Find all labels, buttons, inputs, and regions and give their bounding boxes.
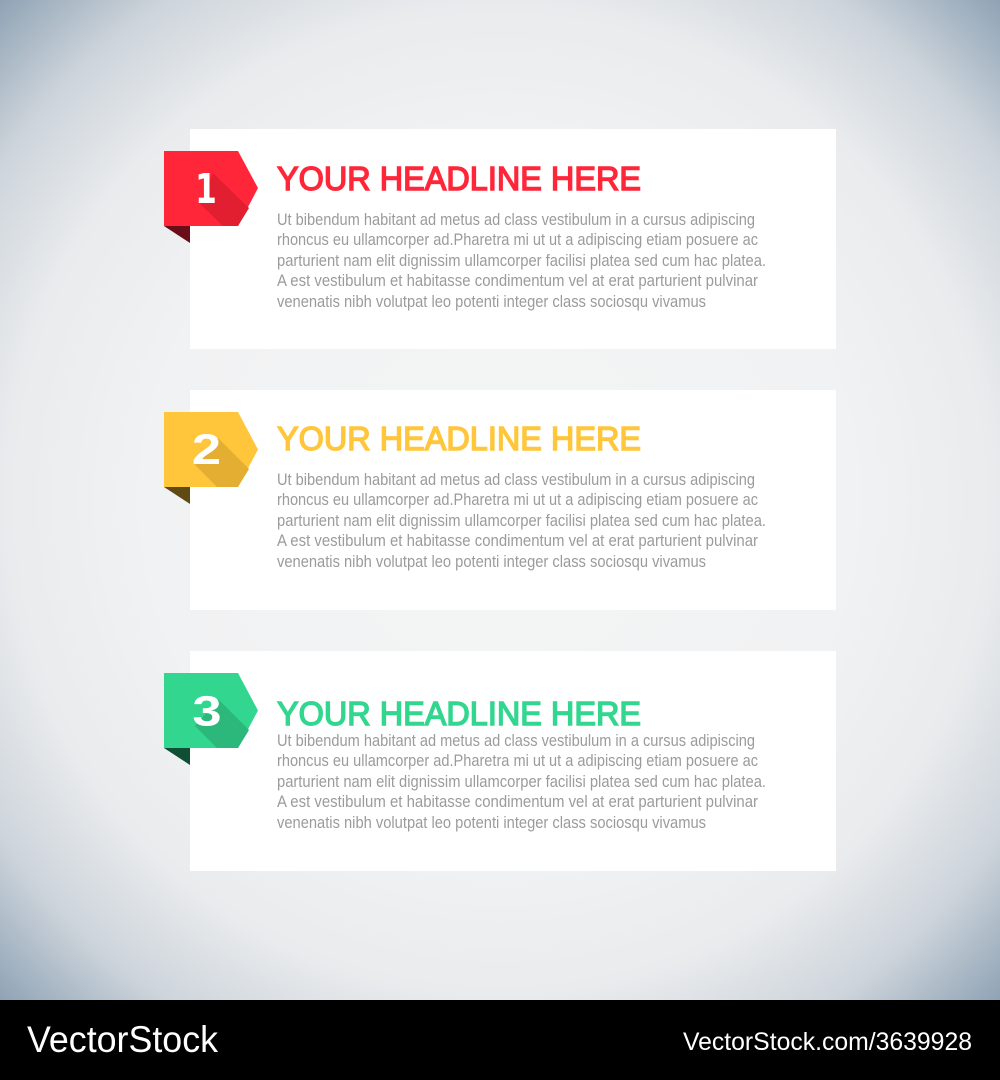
flag shadow 2 [195,438,249,487]
footer logo text: VectorStock [27,1019,218,1060]
body text 3: parturient nam elit dignissim ullamcorper facilisi platea sed cum hac platea. [277,772,766,791]
icon: ribbon fold 2 [164,487,190,504]
body text 3: rhoncus eu ullamcorper ad.Pharetra mi ut ut a adipiscing etiam posuere ac [277,751,758,770]
headline 1: YOUR HEADLINE HERE [277,160,641,197]
footer url text: VectorStock.com/3639928 [683,1028,972,1056]
body text 3: Ut bibendum habitant ad metus ad class vestibulum in a cursus adipiscing [277,731,755,750]
body text 3: venenatis nibh volutpat leo potenti integer class sociosqu vivamus [277,813,706,832]
body text 2: venenatis nibh volutpat leo potenti integer class sociosqu vivamus [277,552,706,571]
card 2 [190,390,836,610]
body text 3 [277,731,766,832]
panel: item 3 [164,651,836,871]
icon: ribbon fold 1 [164,226,190,243]
body text 1: rhoncus eu ullamcorper ad.Pharetra mi ut ut a adipiscing etiam posuere ac [277,230,758,249]
icon: number flag 2 [164,412,258,487]
body text 1: A est vestibulum et habitasse condimentum vel at erat parturient pulvinar [277,271,758,290]
body text 2: Ut bibendum habitant ad metus ad class vestibulum in a cursus adipiscing [277,470,755,489]
body text 1 [277,210,766,311]
icon: number flag 1 [164,151,258,226]
card 1 [190,129,836,349]
body text 1: Ut bibendum habitant ad metus ad class vestibulum in a cursus adipiscing [277,210,755,229]
body text 1: venenatis nibh volutpat leo potenti integer class sociosqu vivamus [277,292,706,311]
headline 2: YOUR HEADLINE HERE [277,420,641,457]
flag shadow 3 [195,699,249,748]
flag shadow 1 [200,173,249,226]
footer bar [0,1000,1000,1080]
body text 2: rhoncus eu ullamcorper ad.Pharetra mi ut ut a adipiscing etiam posuere ac [277,490,758,509]
number 2: 2 [192,426,221,474]
panel: item 2 [164,390,836,610]
body text 2: A est vestibulum et habitasse condimentum vel at erat parturient pulvinar [277,531,758,550]
panel: item 1 [164,129,836,349]
body text 1: parturient nam elit dignissim ullamcorper facilisi platea sed cum hac platea. [277,251,766,270]
card 3 [190,651,836,871]
number 1: 1 [195,165,217,213]
number 3: 3 [192,688,222,735]
icon: ribbon fold 3 [164,748,190,765]
body text 3: A est vestibulum et habitasse condimentum vel at erat parturient pulvinar [277,792,758,811]
icon: number flag 3 [164,673,258,748]
headline 3: YOUR HEADLINE HERE [277,695,641,732]
body text 2: parturient nam elit dignissim ullamcorper facilisi platea sed cum hac platea. [277,511,766,530]
body text 2 [277,470,766,571]
